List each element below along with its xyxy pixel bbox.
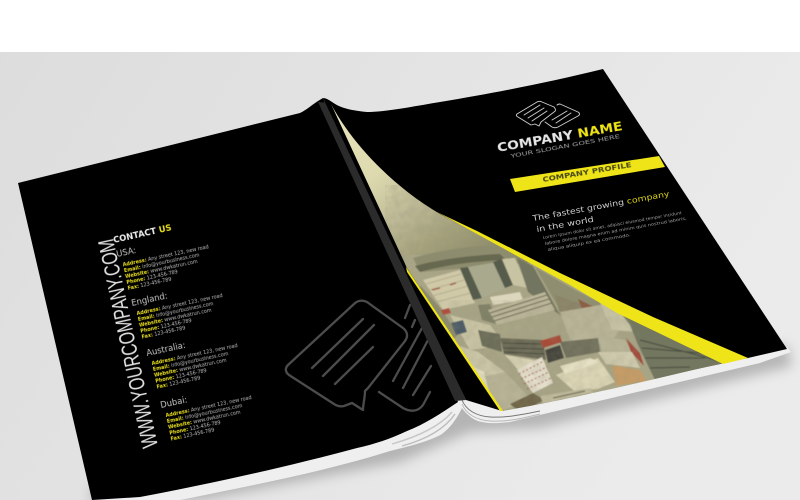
- yellow title bar: [510, 156, 665, 192]
- contact: USA: Address: Any street 123, new road: [122, 244, 209, 268]
- contact: Australia: Fax: 123-456-789: [156, 375, 201, 391]
- body paragraph: Lorem ipsum dolor sit amet, adipisci eiusmod tempor incidunt: [542, 210, 682, 240]
- contact: USA: USA:: [115, 245, 137, 259]
- tagline: in the world: [536, 215, 594, 234]
- company name: COMPANY NAME: [496, 119, 624, 155]
- contact: Australia: Email: info@yourbusiness.com: [152, 351, 229, 373]
- cover photo: city: [331, 104, 722, 411]
- tagline: [531, 189, 671, 234]
- contact: England: Address: Any street 123, new road: [136, 293, 223, 317]
- contact: England: England:: [130, 291, 168, 308]
- contact: England: Fax: 123-456-789: [141, 325, 186, 341]
- yellow edge along spine: [406, 267, 503, 411]
- contact: USA: Fax: 123-456-789: [127, 277, 172, 292]
- website vertical text: WWW.YOURCOMPANY.COM: [93, 237, 163, 450]
- contact: Australia: Address: Any street 123, new road: [151, 343, 238, 367]
- contact: USA: Email: info@yourbusiness.com: [124, 252, 200, 274]
- page block edge: [92, 347, 791, 500]
- contact: England: Email: info@yourbusiness.com: [137, 301, 214, 323]
- contact: England: Phone: 123-456-789: [140, 318, 192, 335]
- spine: [318, 102, 466, 401]
- contact: Dubai: Phone: 123-456-789: [169, 420, 221, 437]
- tagline: The fastest growing company: [531, 189, 671, 223]
- book shadow: [90, 345, 792, 500]
- contact: Australia: Phone: 123-456-789: [155, 368, 207, 385]
- contact: Dubai: Website: www.dwkatrun.com: [168, 410, 241, 431]
- contact heading: CONTACT US: [112, 222, 172, 245]
- contact: England: [130, 279, 228, 341]
- slogan: YOUR SLOGAN GOES HERE: [509, 134, 621, 160]
- contact: England: Website: www.dwkatrun.com: [139, 308, 212, 329]
- icon: logo speech bubbles: [516, 101, 580, 128]
- body paragraph: aliqua aliquip ex ea commodo.: [547, 232, 631, 252]
- contact: Australia: [145, 329, 243, 391]
- body paragraph: [542, 210, 687, 252]
- contact: USA: Phone: 123-456-789: [126, 269, 178, 286]
- contact: Dubai: Address: Any street 123, new road: [165, 395, 252, 419]
- contact: USA: [115, 230, 214, 293]
- contact: Dubai: Fax: 123-456-789: [170, 427, 215, 443]
- yellow diagonal band: [437, 212, 748, 364]
- contact: USA: Website: www.dwkatrun.com: [125, 259, 199, 280]
- contact: Australia: Website: www.dwkatrun.com: [154, 358, 227, 379]
- contact: Australia: Australia:: [145, 340, 186, 358]
- icon: large speech bubbles: [286, 301, 431, 411]
- bar title: COMPANY PROFILE: [542, 161, 633, 184]
- contact: Dubai: Dubai:: [159, 394, 188, 410]
- contact: Dubai: Email: info@yourbusiness.com: [166, 403, 243, 425]
- body paragraph: labore dolore magna enim ad minim quis nostrud laboris,: [544, 216, 687, 246]
- panel: back cover: [18, 98, 458, 500]
- panel: front cover: [320, 69, 787, 420]
- contact: Dubai: [159, 381, 257, 443]
